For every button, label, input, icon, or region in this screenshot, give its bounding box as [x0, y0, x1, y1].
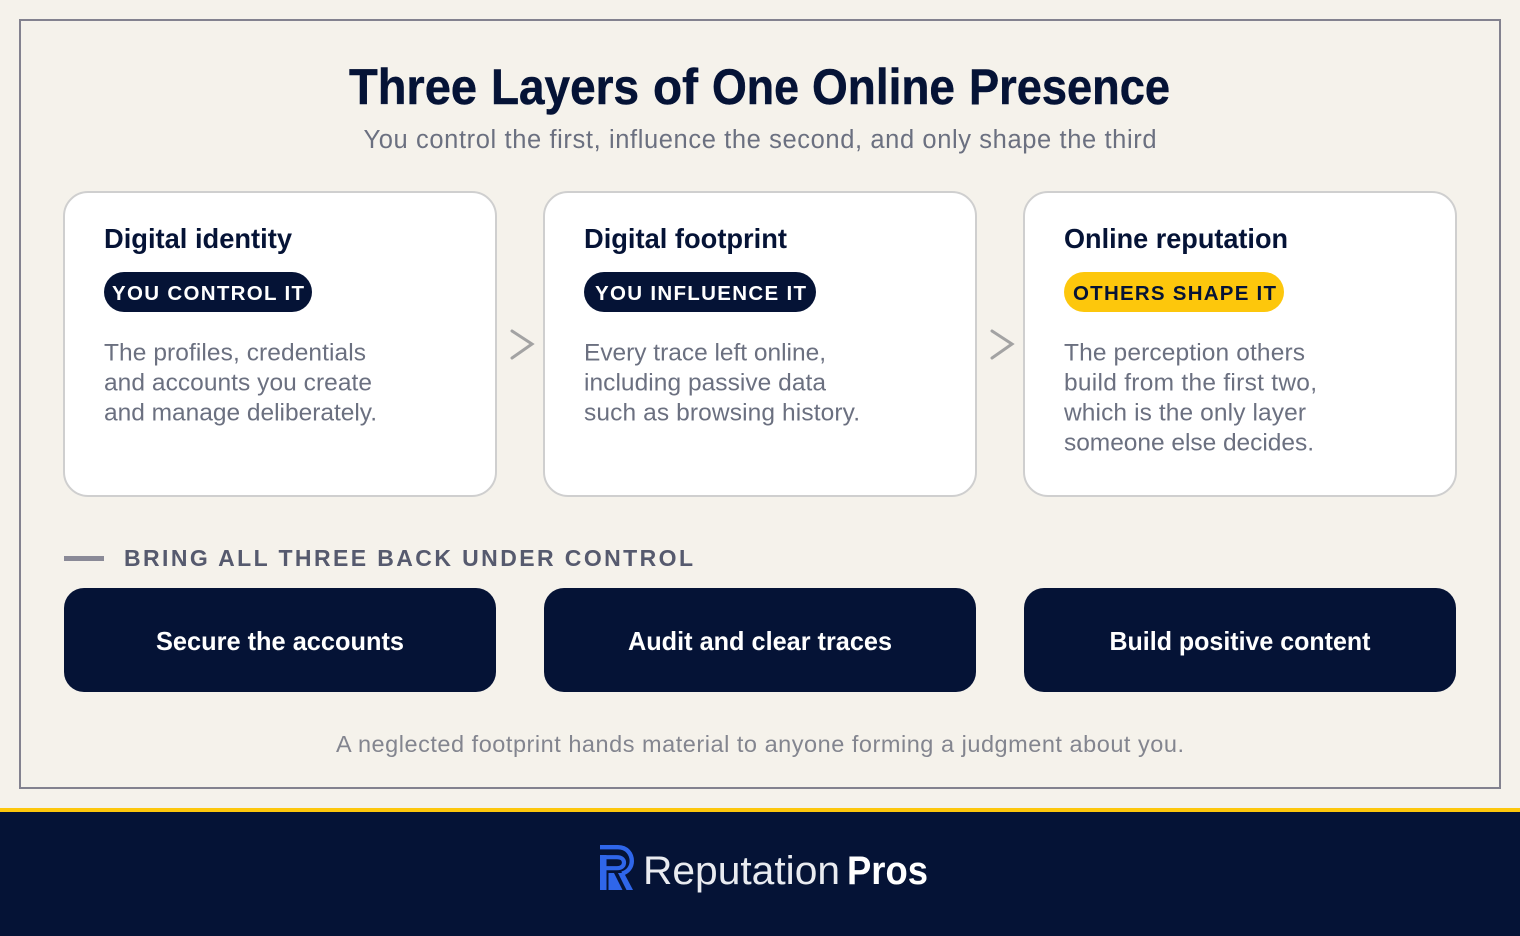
footer band: [0, 808, 1520, 936]
description: online reputation: build from the first two,: [1064, 370, 1317, 396]
action: audit and clear traces: Audit and clear traces: [628, 626, 892, 656]
description: digital footprint: [584, 340, 860, 426]
description: online reputation: which is the only layer: [1063, 400, 1306, 426]
description: digital footprint: such as browsing history.: [584, 400, 860, 426]
title: Presence: [969, 59, 1170, 115]
arrow: footprint to reputation: [992, 331, 1012, 358]
outer frame: [20, 20, 1500, 788]
action: build positive content: Build positive content: [1110, 626, 1371, 656]
heading: digital identity: Digital identity: [104, 223, 292, 254]
description: online reputation: [1063, 340, 1317, 456]
action: secure the accounts: [64, 588, 496, 692]
title: One: [712, 59, 799, 115]
title: Online: [812, 59, 955, 115]
heading: online reputation: Online reputation: [1064, 223, 1288, 254]
arrow: identity to footprint: [512, 331, 532, 358]
description: digital identity: [104, 340, 377, 426]
description: digital footprint: including passive data: [584, 370, 826, 396]
badge: you influence it: [584, 272, 816, 312]
description: digital identity: and manage deliberately.: [104, 400, 377, 426]
title: [349, 59, 1170, 115]
heading: digital footprint: Digital footprint: [584, 223, 787, 254]
description: digital identity: and accounts you create: [104, 370, 372, 396]
panel: digital identity: [64, 192, 496, 496]
icon: R mark: [600, 847, 633, 890]
subtitle: You control the first, influence the second, and only shape the third: [364, 126, 1156, 154]
panel: digital footprint: [544, 192, 976, 496]
section heading: bring all three back under control: BRING ALL THREE BACK UNDER CONTROL: [124, 545, 693, 571]
badge: you control it: [104, 272, 312, 312]
title: Three: [349, 59, 477, 115]
description: online reputation: The perception others: [1064, 340, 1305, 366]
badge: you control it: YOU CONTROL IT: [112, 282, 304, 305]
description: digital footprint: Every trace left online,: [584, 340, 826, 366]
action: audit and clear traces: [544, 588, 976, 692]
title: Layers: [491, 59, 639, 115]
panel: online reputation: [1024, 192, 1456, 496]
badge: others shape it: OTHERS SHAPE IT: [1073, 282, 1276, 305]
badge: you influence it: YOU INFLUENCE IT: [595, 282, 806, 305]
description: online reputation: someone else decides.: [1064, 430, 1314, 456]
title: of: [653, 59, 698, 115]
wordmark: Reputation: [643, 849, 840, 893]
badge: others shape it: [1064, 272, 1284, 312]
footnote: A neglected footprint hands material to anyone forming a judgment about you.: [336, 731, 1184, 757]
action: secure the accounts: Secure the accounts: [156, 626, 404, 656]
action: build positive content: [1024, 588, 1456, 692]
logo: reputation pros: Pros: [847, 849, 928, 893]
logo: reputation pros: [600, 847, 928, 893]
description: digital identity: The profiles, credentials: [104, 340, 366, 366]
